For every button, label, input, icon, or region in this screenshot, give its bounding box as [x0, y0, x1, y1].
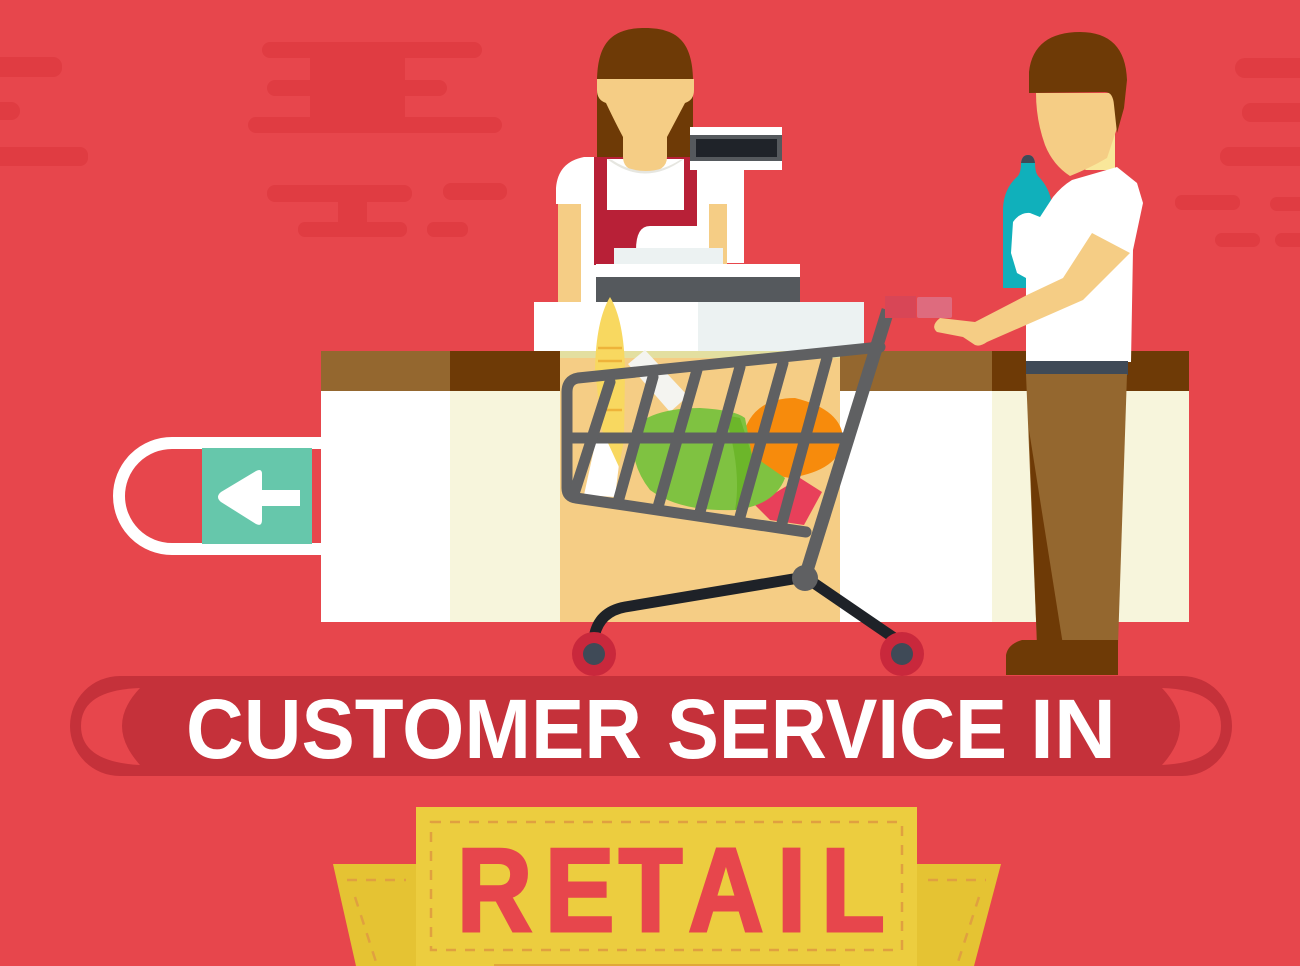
title text: SERVICE [667, 682, 1007, 776]
groceries [584, 297, 843, 525]
cashier [556, 28, 744, 302]
retail ribbon [333, 807, 1001, 966]
background cloud shapes [0, 42, 1300, 247]
customer [934, 32, 1143, 675]
shopping cart [567, 296, 952, 676]
title text: CUSTOMER [186, 682, 642, 776]
shopping bag handle with arrow tag [119, 443, 321, 549]
title text: IN [1030, 682, 1116, 776]
cash register [596, 127, 800, 302]
title banner [70, 676, 1232, 776]
title text [186, 682, 1116, 776]
ribbon word: RETAIL [457, 824, 885, 956]
counter [321, 302, 1189, 622]
